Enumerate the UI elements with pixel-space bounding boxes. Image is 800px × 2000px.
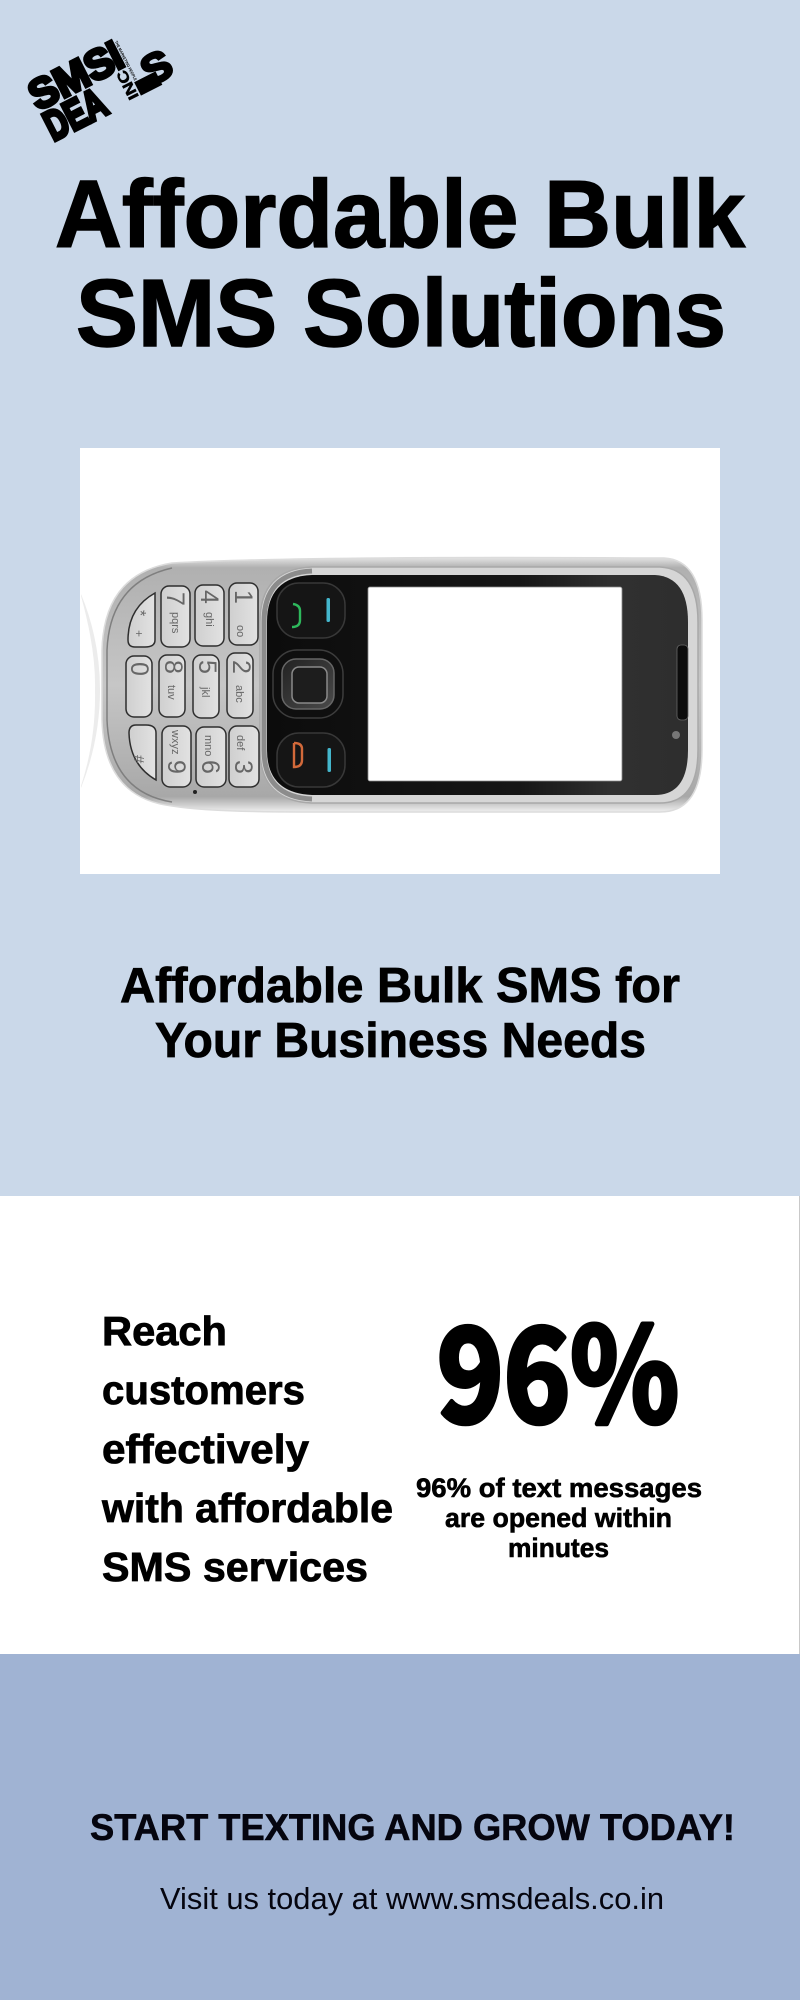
keypad labels: + — [132, 630, 146, 637]
keypad labels: def — [234, 735, 246, 751]
text block: reach customers — [101, 1308, 393, 1590]
statistic: 96%: 96% — [437, 1272, 679, 1460]
text block: reach customers: SMS services — [102, 1544, 368, 1590]
keypad labels: wxyz — [169, 729, 181, 754]
keypad labels: # — [130, 755, 147, 764]
keypad — [126, 583, 259, 787]
keypad labels: abc — [233, 685, 245, 703]
caption: 96% of text messages: 96% of text messages — [416, 1473, 702, 1503]
keypad labels: 9 — [162, 760, 190, 774]
call to action heading: START TEXTING AND GROW TODAY! — [90, 1807, 735, 1848]
navigation button — [273, 650, 343, 718]
panel: call to action background — [0, 1654, 800, 2000]
logo: SMS Deals Inc: DEA — [36, 79, 114, 149]
caption: 96% of text messages: are opened within — [445, 1503, 672, 1533]
call button — [277, 583, 345, 638]
logo: SMS Deals Inc: THE MARKETING PEOPLE — [114, 40, 138, 82]
keypad labels: 3 — [229, 760, 257, 774]
caption: 96% of text messages — [416, 1473, 702, 1563]
keypad labels: 2 — [227, 660, 255, 674]
keypad labels: mno — [202, 735, 214, 756]
black face — [267, 575, 688, 795]
subheading: Affordable Bulk SMS for — [120, 959, 680, 1013]
panel: stats background — [0, 1196, 800, 1654]
subheading — [120, 959, 680, 1068]
keypad labels: 0 — [125, 662, 153, 676]
caption: 96% of text messages: minutes — [508, 1533, 609, 1563]
keypad labels: 6 — [196, 760, 224, 774]
title — [55, 161, 746, 367]
logo: SMS Deals Inc: S — [133, 40, 180, 95]
keypad labels: jkl — [199, 686, 211, 697]
title: Affordable Bulk — [55, 161, 746, 268]
title: SMS Solutions — [76, 260, 726, 367]
logo: SMS Deals Inc — [21, 14, 182, 149]
speaker — [677, 645, 688, 720]
keypad labels: ghi — [203, 612, 215, 627]
keypad labels: 4 — [195, 590, 223, 604]
keypad labels: 7 — [161, 592, 189, 606]
text block: reach customers: customers — [102, 1367, 305, 1413]
subheading: Your Business Needs — [155, 1014, 646, 1068]
screen — [368, 587, 622, 781]
logo: SMS Deals Inc: INC — [113, 67, 143, 102]
image: feature phone — [80, 448, 720, 874]
keypad labels: * — [131, 610, 148, 616]
divider edge — [799, 1196, 800, 1654]
phone body — [102, 558, 702, 812]
text block: reach customers: with affordable — [101, 1485, 393, 1531]
panel: hero background — [0, 0, 800, 1196]
keypad labels: oo — [234, 625, 246, 637]
ghost edge of phone — [81, 594, 100, 788]
keypad labels: 5 — [193, 660, 221, 674]
logo: SMS Deals Inc: SMS — [21, 36, 122, 119]
website line: Visit us today at www.smsdeals.co.in — [160, 1881, 664, 1916]
chrome frame — [260, 567, 698, 803]
keypad labels: 8 — [159, 660, 187, 674]
text block: reach customers: effectively — [102, 1426, 309, 1472]
keypad labels — [125, 590, 257, 774]
text block: reach customers: Reach — [102, 1308, 227, 1354]
keypad labels: tuv — [165, 685, 177, 700]
keypad labels: 1 — [229, 590, 257, 604]
end button — [277, 733, 345, 787]
keypad labels: pqrs — [169, 612, 181, 634]
